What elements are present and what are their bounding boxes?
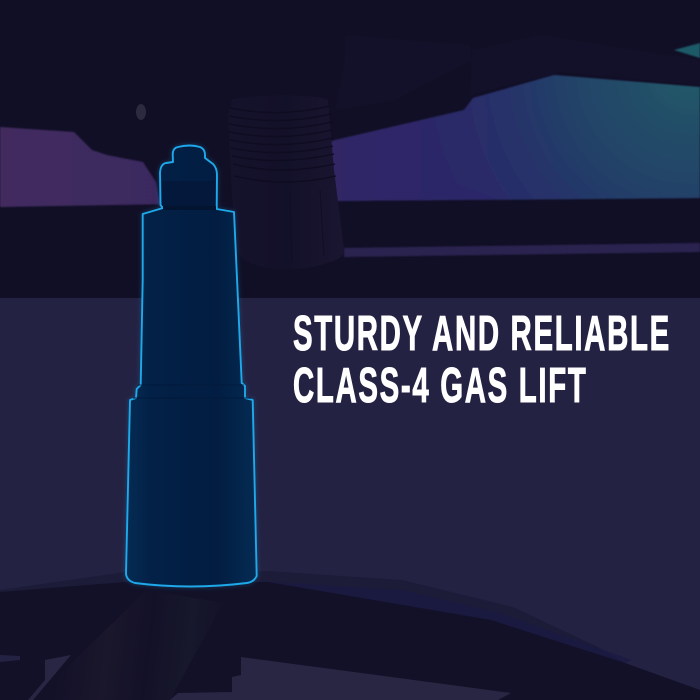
background: chair base arms [0, 571, 700, 700]
background: gas cylinder mechanism behind [228, 95, 344, 270]
heading: sturdy and reliable class-4 gas lift: CLASS-4 GAS LIFT [293, 357, 586, 413]
gas lift illustration [126, 146, 257, 586]
background: lower floor area [0, 298, 700, 700]
gas lift top detail shading [133, 181, 251, 399]
gas lift glow [126, 146, 257, 586]
heading: sturdy and reliable class-4 gas lift [293, 305, 669, 413]
gas lift body and outline [126, 146, 257, 586]
background: chair plate details [136, 35, 700, 120]
heading: sturdy and reliable class-4 gas lift: STURDY AND RELIABLE [293, 305, 669, 361]
background: purple to teal wall band [0, 43, 700, 257]
